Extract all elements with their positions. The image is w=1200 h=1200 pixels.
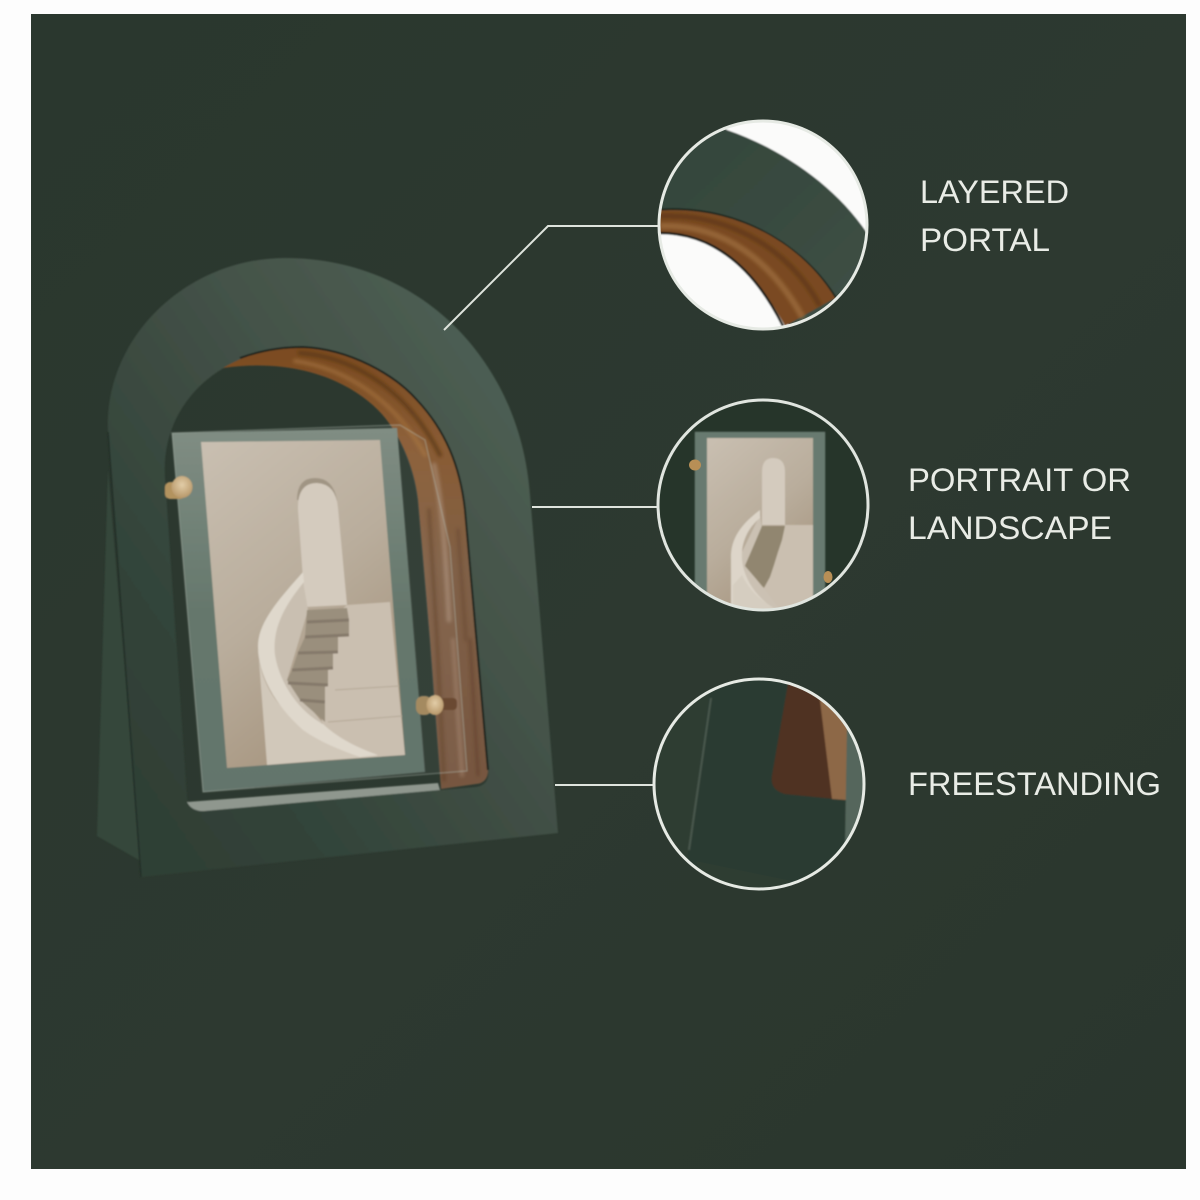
floor plane: [763, 524, 814, 608]
line to portrait or landscape: [532, 506, 658, 508]
lower wall fill: [734, 577, 770, 608]
wood highlight: [660, 226, 803, 318]
brass pin upper: [689, 460, 701, 470]
stand to panel shadow line: [108, 432, 141, 877]
wall left of stairs: [272, 575, 323, 723]
arched front panel: [108, 258, 558, 877]
brass pin lower: [416, 695, 457, 715]
dark edge above wood: [655, 209, 836, 298]
line to layered portal: [444, 226, 660, 330]
step shadows: [288, 620, 349, 702]
wood band: [655, 210, 835, 326]
acrylic sheet: [172, 428, 425, 792]
arched doorway: [762, 458, 785, 525]
circle outline: [659, 121, 867, 329]
curved balustrade: [730, 510, 762, 604]
circle base white: [660, 122, 866, 328]
dark arc edge: [660, 233, 783, 326]
line to freestanding: [555, 784, 654, 786]
acrylic sheet: [694, 431, 826, 596]
lower wall: [258, 648, 378, 765]
label: portrait or landscape: PORTRAIT OR: [908, 462, 1131, 498]
curved balustrade: [258, 572, 378, 757]
wood opening: [771, 684, 832, 799]
circle base: [650, 670, 880, 900]
photo paper: [707, 438, 813, 618]
circle outline: [654, 679, 864, 889]
label: layered portal: LAYERED: [920, 174, 1069, 210]
detail circle: layered portal: [658, 120, 868, 330]
wood light strip: [819, 700, 848, 801]
right side glass strip: [844, 729, 862, 842]
detail circle: portrait or landscape: [656, 398, 870, 612]
wood shadow: [660, 216, 820, 306]
door recess shadow: [297, 478, 337, 500]
brass pin lower: [824, 571, 832, 583]
wood edge shadow: [240, 347, 488, 770]
circle base dark: [650, 390, 880, 620]
label: freestanding: FREESTANDING: [908, 766, 1161, 802]
label: portrait or landscape second line: LANDSCAPE: [908, 510, 1112, 546]
rear stand: [97, 470, 141, 862]
label: layered portal second line: PORTAL: [920, 222, 1050, 258]
stand edge: [689, 698, 711, 850]
staircase steps: [745, 526, 785, 588]
wall left of stairs: [742, 518, 764, 598]
wood grain: [295, 353, 478, 780]
staircase steps: [287, 608, 349, 722]
photograph: spiral staircase: [201, 440, 405, 768]
front panel: [688, 680, 870, 900]
faint floor steps: [328, 686, 402, 722]
frame face: [662, 129, 866, 324]
product: arched frame: [97, 258, 558, 877]
glass back plate edge: [187, 783, 440, 811]
circle outline: [658, 400, 868, 610]
leader lines: [444, 226, 660, 785]
floor plane: [305, 602, 405, 760]
photo paper: [201, 440, 405, 768]
floor: [696, 861, 792, 895]
brass pin upper: [165, 476, 192, 499]
wood inner layer: [223, 347, 488, 789]
detail circle: freestanding: [652, 678, 866, 890]
clear acrylic edge: [172, 425, 467, 792]
arched doorway: [298, 483, 347, 607]
